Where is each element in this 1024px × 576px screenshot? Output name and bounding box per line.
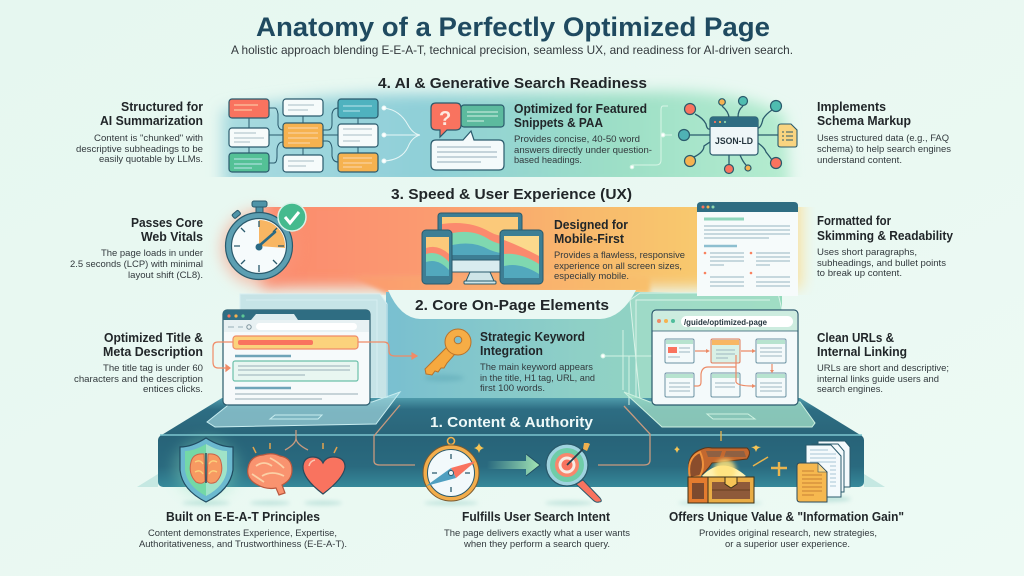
band: core on-page background [386, 292, 782, 420]
glass panel: left stack [240, 294, 387, 398]
browser window: clean URLs and internal links: /guide/optimized-page [684, 317, 767, 327]
text: schema markup: Schema Markup [817, 114, 911, 128]
text: schema markup: Uses structured data (e.g., FAQ [817, 133, 949, 144]
browser window: clean URLs and internal links [652, 310, 798, 405]
text: schema markup: schema) to help search engines [817, 144, 951, 155]
text: featured snippets: Optimized for Featured [514, 102, 647, 116]
glass panel: right stack [630, 293, 782, 410]
text: mobile first: Mobile-First [554, 232, 625, 246]
text: schema markup: understand content. [817, 155, 902, 166]
heading: layer 1: 1. Content & Authority [430, 414, 594, 431]
text: keyword integration: in the title, H1 tag, URL, and [480, 373, 595, 384]
text: structured for AI summarization: descriptive subheadings to be [76, 144, 203, 155]
text: mobile first [554, 218, 685, 282]
text: mobile first: especially mobile. [554, 271, 629, 282]
icon: stopwatch with check badge [226, 201, 306, 280]
text: title and meta description: entices clicks. [143, 384, 203, 395]
text: clean URLs: internal links guide users and [817, 374, 939, 385]
icon: question speech bubbles: ? [439, 108, 451, 130]
text: core web vitals: Passes Core [131, 216, 203, 230]
text: featured snippets: based headings. [514, 155, 582, 166]
tab: core on-page heading background [388, 290, 636, 319]
text: title and meta description: Optimized Title & [104, 331, 203, 345]
text: structured for AI summarization: Content is "chunked" with [94, 133, 203, 144]
text: keyword integration: The main keyword appears [480, 362, 593, 373]
text: schema markup [817, 100, 951, 166]
text: search intent: The page delivers exactly what a user wants [444, 528, 630, 539]
text: skimming and readability: Uses short paragraphs, [817, 247, 917, 258]
text: core web vitals: 2.5 seconds (LCP) with minimal [70, 259, 203, 270]
text: title and meta description [74, 331, 203, 395]
icon: research documents [797, 441, 850, 502]
text: core web vitals: The page loads in under [101, 248, 203, 259]
glass base: left laptop [207, 392, 400, 427]
circuit lines [630, 106, 672, 169]
text: keyword integration: first 100 words. [480, 383, 545, 394]
text: unique value: Provides original research, new strategies, [699, 528, 877, 539]
subtitle: A holistic approach blending E-E-A-T, technical precision, seamless UX, and readiness for AI-driven search. [231, 43, 793, 57]
text: clean URLs: search engines. [817, 384, 883, 395]
icon: target magnifier [546, 443, 601, 502]
icon: compass [423, 438, 484, 501]
text: schema markup: Implements [817, 100, 886, 114]
arrow: title to keyword [358, 342, 417, 359]
arrows: flows into featured snippet [382, 106, 420, 163]
text: E-E-A-T: Built on E-E-A-T Principles [166, 510, 320, 524]
band: speed and UX background [262, 192, 802, 288]
text: skimming and readability: Skimming & Readability [817, 229, 953, 243]
arrow: intent to target [487, 454, 540, 476]
icon shadows [182, 496, 851, 505]
band: AI readiness background [222, 91, 790, 190]
heading: layer 4: 4. AI & Generative Search Readiness [378, 75, 647, 92]
text: featured snippets [514, 102, 652, 166]
icon: brain [248, 443, 292, 495]
text: keyword integration: Strategic Keyword [480, 330, 585, 344]
text: unique value [669, 510, 904, 550]
browser window: title and meta [223, 310, 370, 405]
text: mobile first: experience on all screen sizes, [554, 261, 682, 272]
icon: heart [303, 443, 345, 494]
text: clean URLs [817, 331, 949, 395]
text: skimming and readability: Formatted for [817, 214, 891, 228]
text: structured for AI summarization: AI Summarization [100, 114, 203, 128]
infographic canvas [70, 16, 953, 549]
text: keyword integration: Integration [480, 344, 543, 358]
text: skimming and readability: to break up content. [817, 268, 902, 279]
icon: question speech bubbles [431, 103, 504, 170]
text: keyword integration [480, 330, 595, 394]
text: search intent: Fulfills User Search Intent [462, 510, 611, 524]
arrow: title to meta [213, 342, 233, 371]
circuit lines: right [601, 330, 652, 405]
glow: stopwatch halo [221, 210, 297, 286]
band: coral join above core section [352, 276, 650, 293]
text: featured snippets: Snippets & PAA [514, 116, 603, 130]
icon: responsive devices [422, 213, 543, 284]
text: unique value: or a superior user experience. [725, 539, 850, 550]
text: E-E-A-T [139, 510, 347, 550]
text: skimming and readability: subheadings, and bullet points [817, 258, 946, 269]
icon: JSON-LD schema network [678, 96, 797, 174]
text: core web vitals: Web Vitals [141, 230, 203, 244]
text: mobile first: Designed for [554, 218, 628, 232]
text: mobile first: Provides a flawless, responsive [554, 250, 685, 261]
text: clean URLs: Clean URLs & [817, 331, 894, 345]
glass base: right laptop [624, 392, 815, 427]
text: title and meta description: The title tag is under 60 [103, 363, 203, 374]
icon: treasure chest [674, 431, 768, 503]
text: search intent [444, 510, 630, 550]
text: title and meta description: Meta Description [103, 345, 203, 359]
circuit lines on platform [285, 405, 650, 465]
text: structured for AI summarization: easily quotable by LLMs. [99, 154, 203, 165]
title: Anatomy of a Perfectly Optimized Page [256, 12, 770, 42]
text: clean URLs: Internal Linking [817, 345, 907, 359]
text: core web vitals [70, 216, 203, 281]
heading: layer 3: 3. Speed & User Experience (UX) [391, 186, 632, 203]
text: E-E-A-T: Authoritativeness, and Trustworthiness (E-E-A-T). [139, 539, 347, 550]
platform: content and authority base [137, 398, 885, 487]
text: title and meta description: characters and the description [74, 374, 203, 385]
text: search intent: when they perform a search query. [463, 539, 610, 550]
icon: content chunk diagram [229, 99, 378, 172]
heading: layer 2: 2. Core On-Page Elements [415, 297, 609, 314]
icon: JSON-LD schema network: JSON-LD [715, 136, 753, 146]
text: E-E-A-T: Content demonstrates Experience, Expertise, [148, 528, 337, 539]
text: featured snippets: Provides concise, 40-50 word [514, 134, 640, 145]
text: core web vitals: layout shift (CL8). [128, 270, 203, 281]
text: clean URLs: URLs are short and descriptive; [817, 363, 949, 374]
text: unique value: Offers Unique Value & "Information Gain" [669, 510, 904, 524]
text: structured for AI summarization: Structured for [121, 100, 203, 114]
text: structured for AI summarization [76, 100, 203, 165]
text: skimming and readability [817, 214, 953, 279]
text: featured snippets: answers directly under question- [514, 145, 652, 156]
icon: skimmable document window [697, 202, 798, 296]
icon: shield with brain [174, 438, 238, 502]
icon: key [424, 329, 471, 382]
icon: plus [771, 462, 787, 476]
